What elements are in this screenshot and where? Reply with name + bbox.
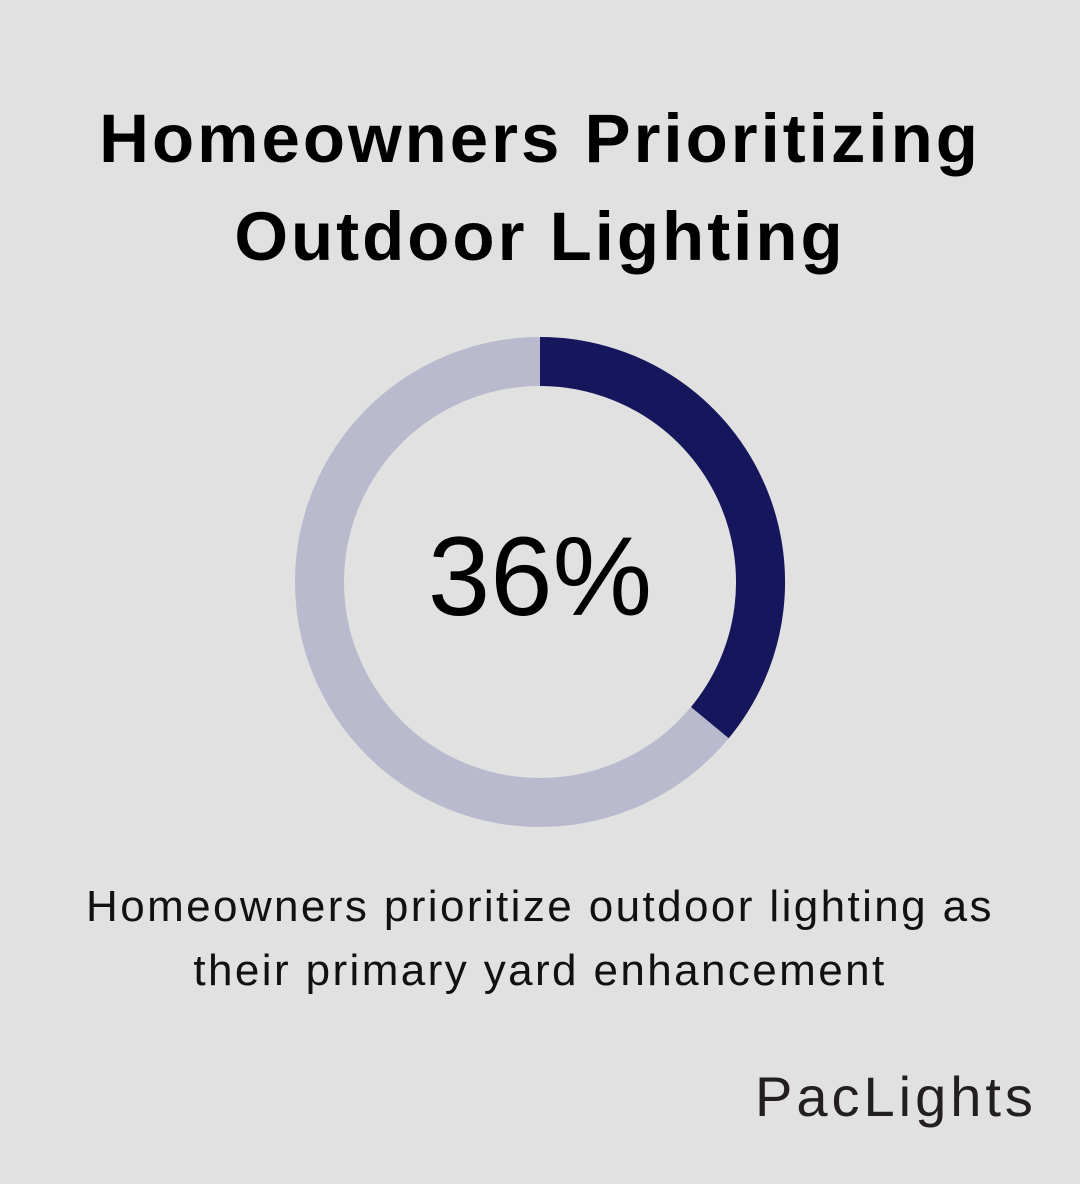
title <box>99 100 981 275</box>
track ring <box>320 362 760 802</box>
description text <box>86 882 994 995</box>
value label: 36% <box>428 514 652 639</box>
value arc 36% <box>540 362 761 723</box>
title: Homeowners Prioritizing <box>99 100 981 177</box>
title: Outdoor Lighting <box>234 198 846 275</box>
logo: PacLights: PacLights <box>755 1065 1037 1128</box>
description text: their primary yard enhancement <box>193 946 887 995</box>
description text: Homeowners prioritize outdoor lighting as <box>86 882 994 931</box>
